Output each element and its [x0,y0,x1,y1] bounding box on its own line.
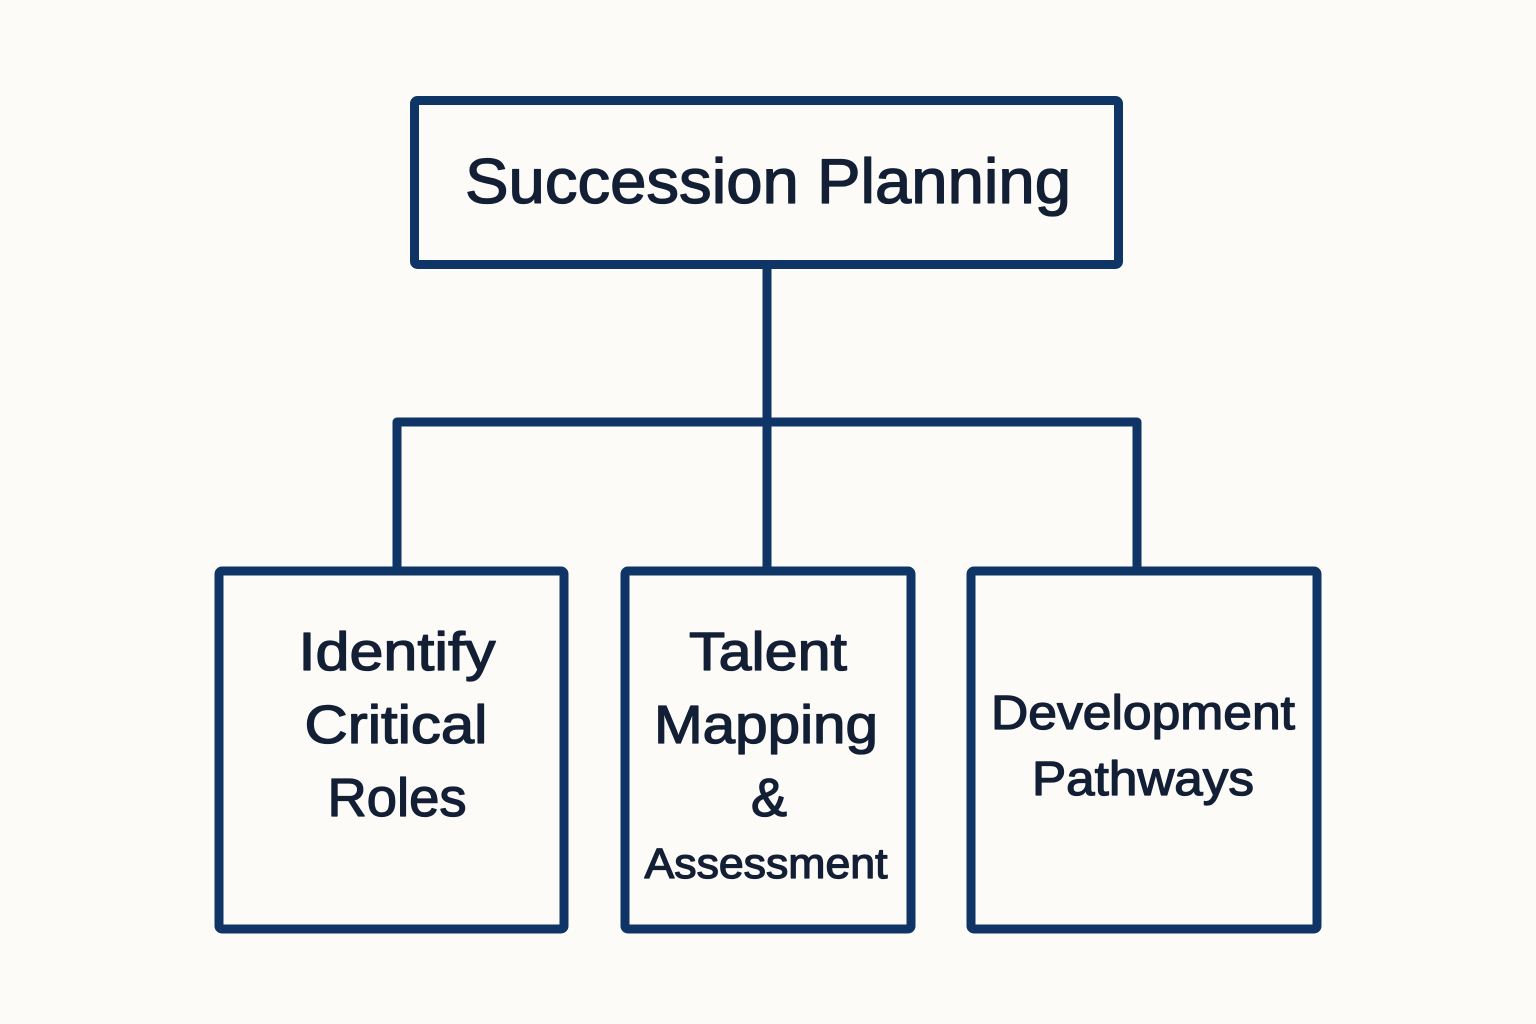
box: Identify Critical Roles: Identify [298,622,496,682]
box: Development Pathways [971,571,1317,929]
box: Talent Mapping & Assessment: Talent [689,622,847,682]
box: Talent Mapping & Assessment: Assessment [644,840,888,888]
box: Succession Planning: Succession Planning [465,147,1071,217]
box: Identify Critical Roles: Roles [328,768,466,828]
box: Talent Mapping & Assessment [625,571,911,929]
box: Talent Mapping & Assessment: Mapping [654,695,878,755]
box: Development Pathways: Pathways [1032,753,1254,806]
box: Talent Mapping & Assessment: & [751,768,787,828]
connectors [397,265,1137,567]
box: Succession Planning [414,100,1118,264]
box: Identify Critical Roles: Critical [304,695,488,755]
box: Identify Critical Roles [219,571,564,929]
box: Development Pathways: Development [991,687,1295,740]
